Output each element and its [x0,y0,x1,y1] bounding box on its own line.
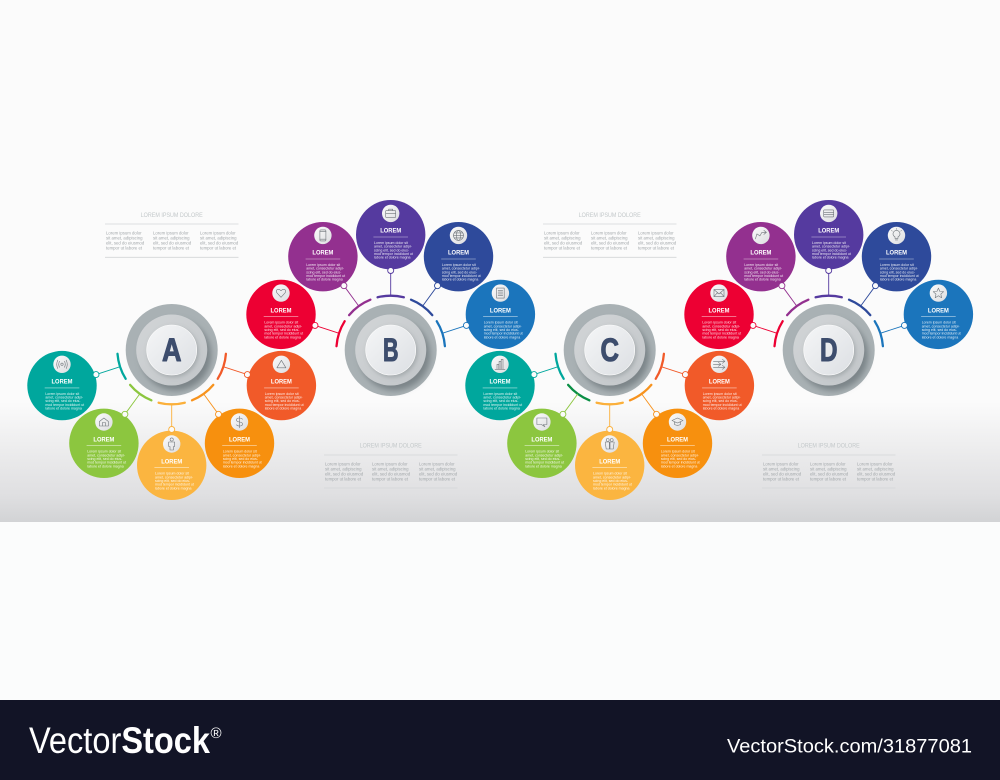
item: blue: scing elit, sed do eius- [922,328,958,332]
icon: phone [320,230,326,241]
item: red: scing elit, sed do eius- [702,328,738,332]
icon: heart [276,289,286,297]
text block: B notes: Lorem ipsum dolor [325,462,361,466]
hub B: B [383,332,398,368]
icon: dollar [236,416,242,428]
item: orange [192,385,274,478]
item: blue: labore et dolore magna [922,335,958,339]
item: violet: mod tempor incididunt ut [374,252,413,256]
text block: D notes: LOREM IPSUM DOLORE [798,442,860,450]
hub B [345,304,437,396]
item: teal: labore et dolore magna [483,407,520,411]
item: green [507,385,589,478]
text block: C notes: Lorem ipsum dolor [544,230,580,236]
text block: C notes: tempor ut labore et [544,246,581,250]
text block: D notes: elit, sed do eiusmod [810,472,849,476]
text block: D notes: Lorem ipsum dolor [763,462,799,466]
item: teal: mod tempor incididunt ut [45,403,84,407]
text block: A notes: elit, sed do eiusmod [200,240,239,246]
item: red: Lorem ipsum dolor sit [264,321,298,325]
text block: D notes: elit, sed do eiusmod [857,472,896,476]
item: orange [630,385,712,478]
text block: B notes: tempor ut labore et [325,476,362,482]
icon: bar chart [495,359,505,369]
item: red-orange: mod tempor incididunt ut [265,403,304,407]
text block: D notes: sit amet, adipiscing [763,466,800,472]
item: violet: Lorem ipsum dolor sit [812,241,846,245]
item: navy: mod tempor incididunt ut [442,274,481,278]
item: red-orange: LOREM [271,379,292,386]
icon: star [933,288,944,298]
item: violet: amet, consectetur adipi- [374,245,413,249]
item: navy: labore et dolore magna [880,278,916,282]
item: green: labore et dolore magna [87,464,124,468]
item: red: LOREM [709,307,730,314]
footer bar [0,700,1000,780]
text block: C notes: Lorem ipsum dolor [638,230,674,236]
text block: A notes: tempor ut labore et [153,246,190,250]
item: violet: scing elit, sed do eius- [374,248,410,252]
icon: home [99,418,108,426]
item: navy: scing elit, sed do eius- [442,270,478,274]
hub D: D [820,332,837,368]
item: blue [437,280,535,349]
item: yellow [137,403,206,500]
item: green: scing elit, sed do eius- [87,457,123,461]
item: teal: labore et dolore magna [45,407,82,411]
item: navy [411,222,493,315]
item: green: labore et dolore magna [525,464,562,468]
item: green: Lorem ipsum dolor sit [87,450,121,454]
icon: speech bubble [537,418,547,427]
item: purple: scing elit, sed do eius- [306,270,342,274]
item: yellow: Lorem ipsum dolor sit [155,472,189,476]
item: yellow [575,403,644,500]
item: red-orange: amet, consectetur adipi- [703,396,741,400]
text block: B notes: LOREM IPSUM DOLORE [360,442,422,450]
item: green: amet, consectetur adipi- [87,453,126,457]
item: orange: Lorem ipsum dolor sit [661,450,695,454]
text block: C notes: tempor ut labore et [638,246,675,250]
item: navy: labore et dolore magna [442,278,478,282]
item: red: Lorem ipsum dolor sit [702,321,736,325]
item: navy: mod tempor incididunt ut [880,274,919,278]
panel: hub D group [684,200,973,396]
item: yellow: LOREM [599,458,621,465]
icon: people [605,438,614,449]
item: purple: LOREM [312,250,334,257]
item: yellow: amet, consectetur adipi- [155,475,194,479]
item: red-orange: scing elit, sed do eius- [703,399,739,403]
text block: B notes: tempor ut labore et [372,476,409,482]
text block: A notes: tempor ut labore et [200,246,237,250]
item: green: scing elit, sed do eius- [525,457,561,461]
item: navy: amet, consectetur adipi- [880,267,918,271]
item: red-orange: mod tempor incididunt ut [703,403,742,407]
item: green: mod tempor incididunt ut [525,461,564,465]
icon: triangle [277,360,286,368]
item: red: amet, consectetur adipi- [702,324,741,328]
item: violet [794,200,863,297]
text block: A notes: Lorem ipsum dolor [153,230,189,236]
item: violet: scing elit, sed do eius- [812,248,848,252]
item: orange: scing elit, sed do eius- [223,457,259,461]
item: violet [356,200,425,297]
item: red-orange [218,351,316,420]
item: blue: LOREM [490,307,511,314]
item: red [684,280,783,349]
text block: D notes: elit, sed do eiusmod [763,472,802,476]
icon: card [824,210,834,217]
hub C: C [600,332,619,368]
text block: B notes: elit, sed do eiusmod [372,472,411,476]
item: violet: mod tempor incididunt ut [812,252,851,256]
item: red: amet, consectetur adipi- [264,324,303,328]
text block: D notes: tempor ut labore et [810,476,847,482]
item: navy: amet, consectetur adipi- [442,267,480,271]
item: purple: scing elit, sed do eius- [744,270,780,274]
item: red-orange: labore et dolore magna [703,407,739,411]
item: orange: labore et dolore magna [223,464,259,468]
text block: D notes: tempor ut labore et [763,476,800,482]
item: violet: LOREM [380,228,402,235]
icon: arrows [713,359,725,369]
text block: D notes: sit amet, adipiscing [857,466,894,472]
text block: C notes: sit amet, adipiscing [591,236,628,240]
text block: C notes: Lorem ipsum dolor [591,230,627,236]
item: blue: mod tempor incididunt ut [484,332,523,336]
item: red-orange: Lorem ipsum dolor sit [265,392,299,396]
item: yellow: labore et dolore magna [155,486,192,490]
item: yellow: scing elit, sed do eius- [155,479,191,483]
item: purple: mod tempor incididunt ut [306,274,345,278]
item: orange: LOREM [667,436,688,443]
text block: C notes: LOREM IPSUM DOLORE [579,212,641,219]
item: purple: Lorem ipsum dolor sit [306,263,340,267]
item: orange: amet, consectetur adipi- [223,453,261,457]
item: blue: labore et dolore magna [484,335,520,339]
text block: A notes: sit amet, adipiscing [106,236,143,240]
item: blue: Lorem ipsum dolor sit [922,321,956,325]
item: yellow: LOREM [161,458,183,465]
item: teal [27,351,126,420]
item: purple: labore et dolore magna [306,278,343,282]
item: teal: scing elit, sed do eius- [483,399,519,403]
item: violet: Lorem ipsum dolor sit [374,241,408,245]
item: navy: scing elit, sed do eius- [880,270,916,274]
text block: C notes: sit amet, adipiscing [638,236,675,240]
icon: graduation cap [672,418,683,425]
item: navy: Lorem ipsum dolor sit [880,263,914,267]
text block: C notes: sit amet, adipiscing [544,236,581,240]
item: teal [465,351,564,420]
item: red-orange: labore et dolore magna [265,407,301,411]
item: yellow: mod tempor incididunt ut [593,483,632,487]
item: purple: Lorem ipsum dolor sit [744,263,778,267]
icon: light bulb [892,228,902,240]
item: blue: Lorem ipsum dolor sit [484,321,518,325]
item: yellow: mod tempor incididunt ut [155,483,194,487]
item: blue: LOREM [928,307,949,314]
item: purple: mod tempor incididunt ut [744,274,783,278]
text block: A notes: Lorem ipsum dolor [106,230,142,236]
footer logo: VectorStock [29,720,210,761]
item: teal: amet, consectetur adipi- [483,396,522,400]
item: blue: amet, consectetur adipi- [922,324,960,328]
item: blue: amet, consectetur adipi- [484,324,522,328]
text block: B notes: sit amet, adipiscing [419,466,456,472]
item: orange: Lorem ipsum dolor sit [223,450,257,454]
text block: D notes [762,442,896,488]
hub D [783,304,875,396]
hub A [126,304,218,396]
item: red-orange: amet, consectetur adipi- [265,396,303,400]
text block: C notes [543,212,677,257]
item: orange: scing elit, sed do eius- [661,457,697,461]
text block: B notes: elit, sed do eiusmod [419,472,458,476]
item: blue: scing elit, sed do eius- [484,328,520,332]
item: navy: LOREM [448,250,469,257]
item: navy: Lorem ipsum dolor sit [442,263,476,267]
item: violet: labore et dolore magna [374,256,411,260]
item: yellow: labore et dolore magna [593,486,630,490]
item: purple: amet, consectetur adipi- [744,267,783,271]
text block: B notes: elit, sed do eiusmod [325,472,364,476]
item: orange: mod tempor incididunt ut [223,461,262,465]
item: red: labore et dolore magna [264,335,301,339]
item: red: mod tempor incididunt ut [702,332,741,336]
text block: A notes: Lorem ipsum dolor [200,230,236,236]
item: orange: labore et dolore magna [661,464,697,468]
text block: B notes: tempor ut labore et [419,476,456,482]
text block: C notes: elit, sed do eiusmod [638,240,677,246]
panel: hub B group [246,200,535,396]
item: blue [875,280,973,349]
item: red-orange: LOREM [709,379,730,386]
text block: C notes: tempor ut labore et [591,246,628,250]
item: blue: mod tempor incididunt ut [922,332,961,336]
item: purple [288,222,370,315]
text block: B notes: Lorem ipsum dolor [419,462,455,466]
item: red-orange: Lorem ipsum dolor sit [703,392,737,396]
item: orange: amet, consectetur adipi- [661,453,699,457]
text block: B notes: sit amet, adipiscing [325,466,362,472]
item: violet: labore et dolore magna [812,256,849,260]
item: teal: amet, consectetur adipi- [45,396,84,400]
text block: C notes: elit, sed do eiusmod [544,240,583,246]
item: purple: labore et dolore magna [744,278,781,282]
hub C [564,304,656,396]
background gradient band [0,0,1000,522]
icon: envelope [714,290,724,297]
item: yellow: Lorem ipsum dolor sit [593,472,627,476]
hub A: A [162,332,181,368]
registered mark: ® [210,725,222,742]
item: red-orange: scing elit, sed do eius- [265,399,301,403]
item: purple: amet, consectetur adipi- [306,267,345,271]
panel: hub C group [465,304,754,500]
item: red: LOREM [271,307,292,314]
icon: person [169,438,175,450]
text block: D notes: sit amet, adipiscing [810,466,847,472]
text block: A notes: tempor ut labore et [106,246,143,250]
item: violet: LOREM [818,228,840,235]
item: navy [849,222,931,315]
item: orange: LOREM [229,436,250,443]
text block: D notes: tempor ut labore et [857,476,894,482]
icon: briefcase [386,209,396,217]
item: green [69,385,151,478]
text block: A notes: elit, sed do eiusmod [106,240,145,246]
footer image id: VectorStock.com/31877081 [727,736,972,758]
icon: signal waves [57,360,67,368]
item: purple: LOREM [750,250,772,257]
item: red-orange [656,351,754,420]
text block: A notes [105,212,239,257]
item: teal: Lorem ipsum dolor sit [45,392,79,396]
item: purple [726,222,808,315]
item: yellow: scing elit, sed do eius- [593,479,629,483]
item: navy: LOREM [886,250,907,257]
item: orange: mod tempor incididunt ut [661,461,700,465]
item: green: mod tempor incididunt ut [87,461,126,465]
item: yellow: amet, consectetur adipi- [593,475,632,479]
item: teal: mod tempor incididunt ut [483,403,522,407]
text block: C notes: elit, sed do eiusmod [591,240,630,246]
text block: D notes: Lorem ipsum dolor [810,462,846,466]
text block: B notes: sit amet, adipiscing [372,466,409,472]
item: teal: Lorem ipsum dolor sit [483,392,517,396]
text block: B notes: Lorem ipsum dolor [372,462,408,466]
item: green: amet, consectetur adipi- [525,453,564,457]
item: teal: LOREM [52,379,73,386]
text block: A notes: sit amet, adipiscing [200,236,237,240]
text block: A notes: sit amet, adipiscing [153,236,190,240]
text block: A notes: elit, sed do eiusmod [153,240,192,246]
icon: globe [454,230,464,240]
icon: trend arrow [755,230,766,239]
item: teal: scing elit, sed do eius- [45,399,81,403]
item: red [246,280,345,349]
panel: hub A group [27,304,316,500]
text block: A notes: LOREM IPSUM DOLORE [141,212,203,219]
item: red: labore et dolore magna [702,335,739,339]
text block: D notes: Lorem ipsum dolor [857,462,893,466]
icon: document [497,288,504,298]
text block: B notes [324,442,458,488]
item: teal: LOREM [490,379,511,386]
item: green: LOREM [93,436,115,443]
item: violet: amet, consectetur adipi- [812,245,851,249]
item: red: mod tempor incididunt ut [264,332,303,336]
item: green: LOREM [531,436,553,443]
item: green: Lorem ipsum dolor sit [525,450,559,454]
item: red: scing elit, sed do eius- [264,328,300,332]
